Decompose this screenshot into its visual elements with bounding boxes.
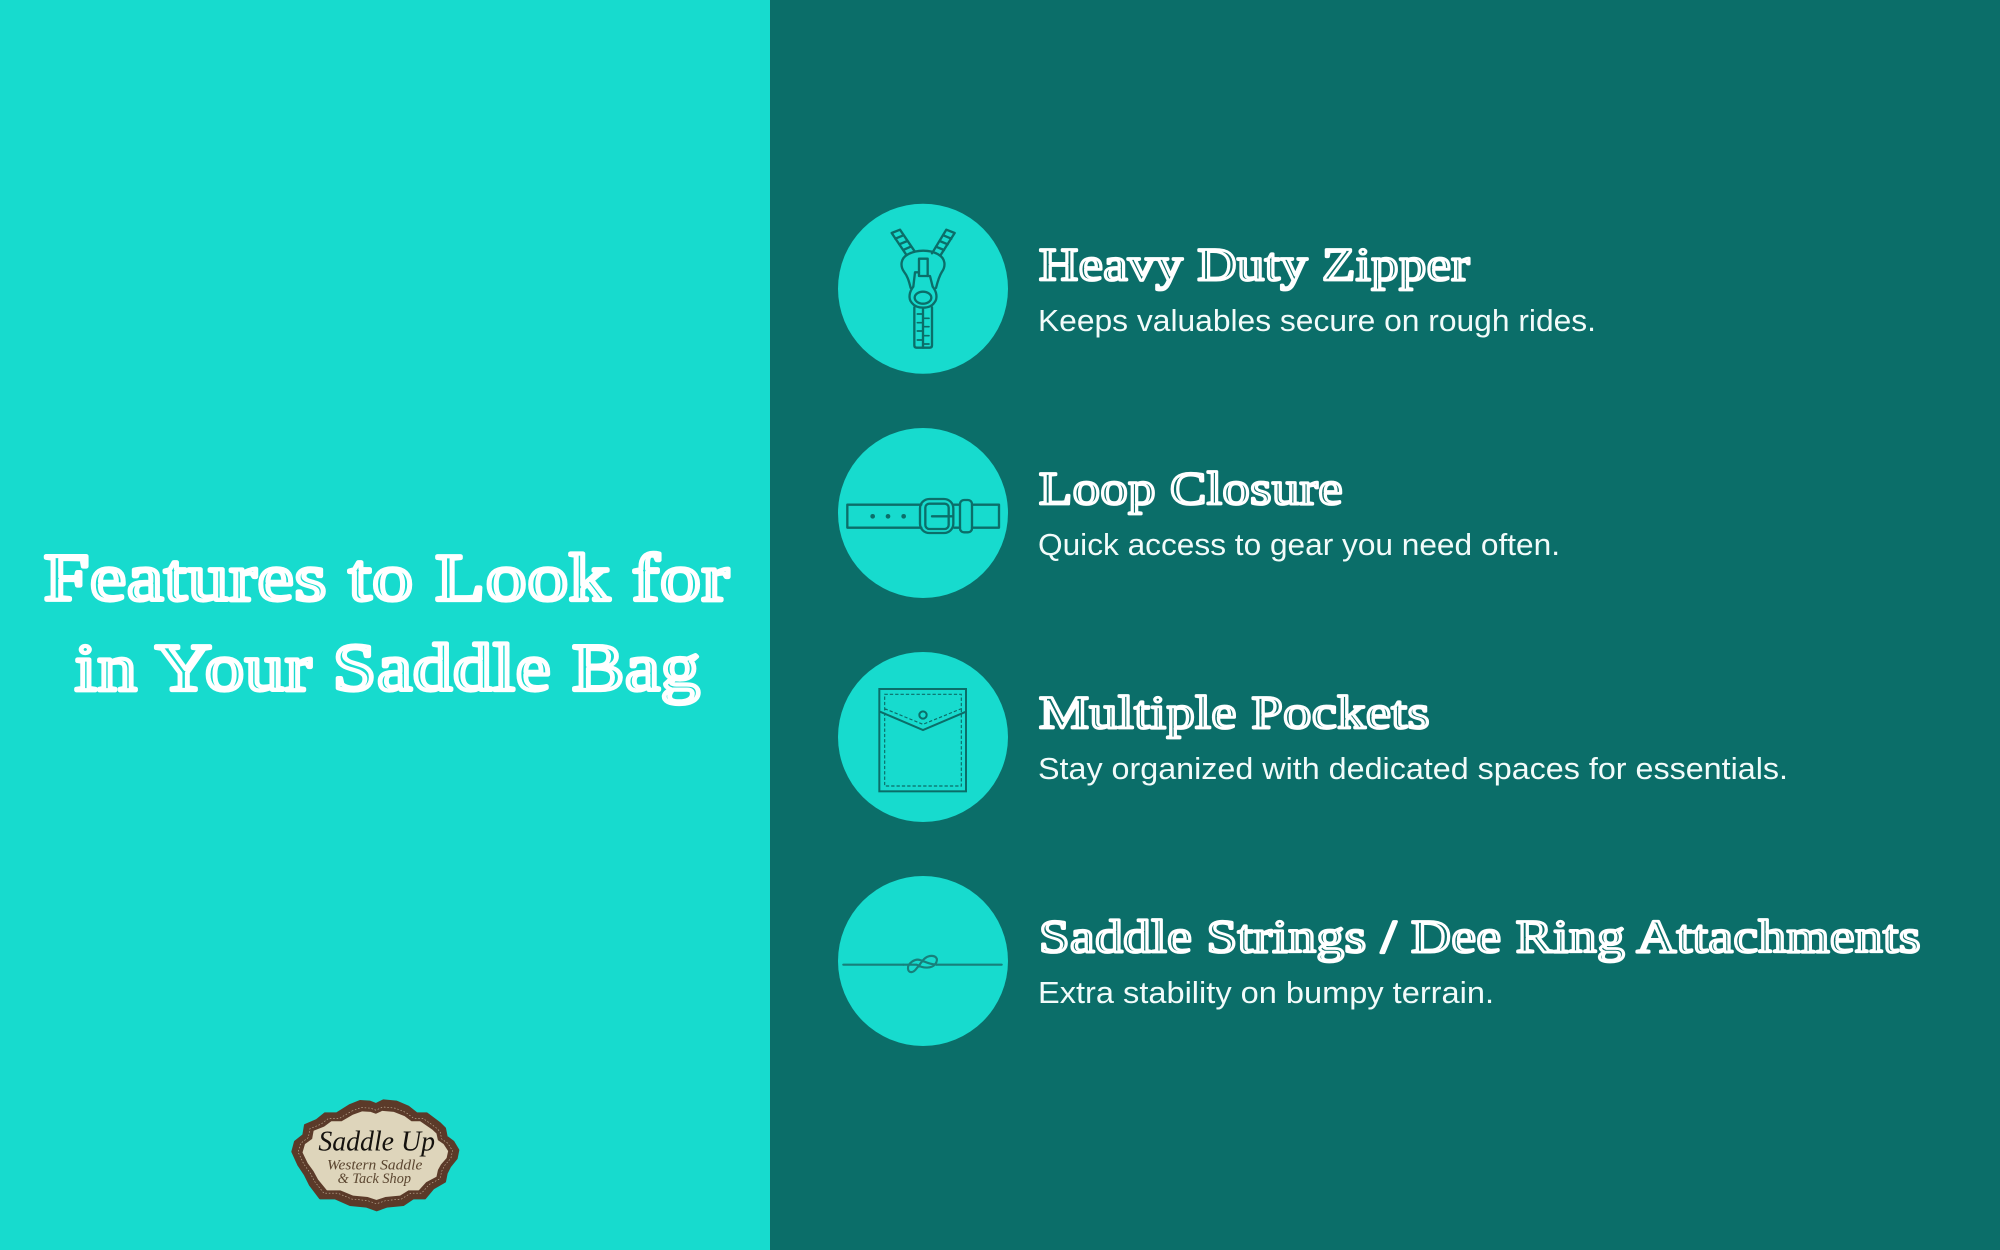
feature: loop closure xyxy=(838,428,1560,598)
logo: Saddle Up badge: Saddle Up xyxy=(318,1126,435,1157)
logo: Saddle Up badge: & Tack Shop xyxy=(338,1171,411,1187)
heading: Loop Closure xyxy=(1039,463,1343,515)
feature: saddle strings xyxy=(838,876,1921,1046)
description: Quick access to gear you need often. xyxy=(1038,527,1560,562)
description: Keeps valuables secure on rough rides. xyxy=(1038,303,1596,338)
logo: Saddle Up badge xyxy=(292,1100,458,1210)
heading: Saddle Strings / Dee Ring Attachments xyxy=(1039,911,1921,963)
title: in Your Saddle Bag xyxy=(75,631,701,705)
panel: right background xyxy=(770,0,2000,1250)
icon: rope knot xyxy=(838,876,1008,1046)
icon: belt xyxy=(838,428,1008,598)
title: Features to Look for xyxy=(44,541,730,615)
logo: Saddle Up badge: Western Saddle xyxy=(327,1158,423,1174)
title xyxy=(44,541,730,705)
heading: Heavy Duty Zipper xyxy=(1039,239,1470,291)
icon: zipper xyxy=(838,204,1008,374)
icon: pocket xyxy=(838,652,1008,822)
feature: multiple pockets xyxy=(838,652,1788,822)
heading: Multiple Pockets xyxy=(1039,687,1430,739)
feature: heavy duty zipper xyxy=(838,204,1596,374)
description: Extra stability on bumpy terrain. xyxy=(1038,975,1494,1010)
panel: left background xyxy=(0,0,770,1250)
description: Stay organized with dedicated spaces for essentials. xyxy=(1038,751,1788,786)
